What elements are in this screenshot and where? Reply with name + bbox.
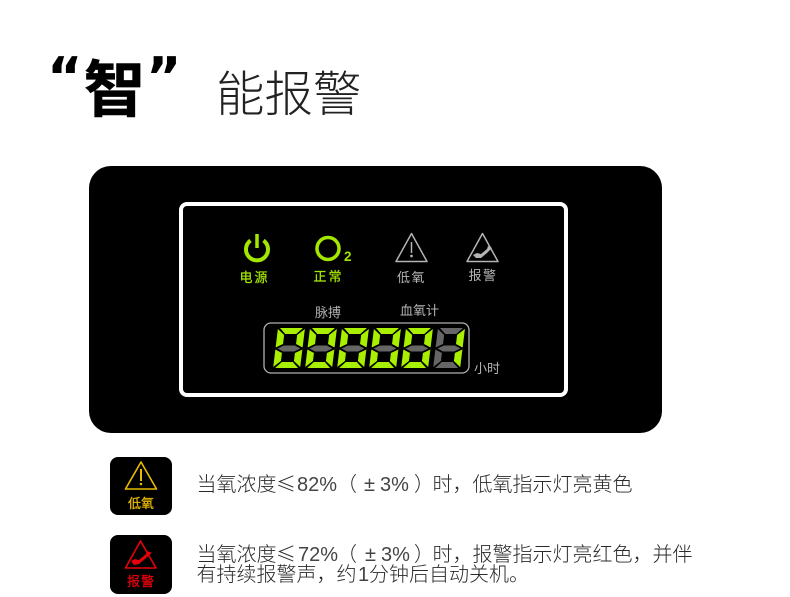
text: alarm description: 时，报警指示灯亮红色，并伴 — [432, 543, 692, 566]
label: power: 电源 — [239, 270, 270, 285]
text: alarm description: ≤ — [276, 538, 296, 567]
text: alarm description: 当氧浓度 — [196, 543, 276, 566]
text: low oxygen description: （ — [337, 474, 357, 496]
seven-segment digits — [273, 328, 465, 368]
text: low oxygen description: ± — [364, 474, 375, 496]
icon: red alarm badge: 报警 — [127, 574, 155, 589]
seven-segment display frame — [264, 323, 469, 373]
panel: device display — [89, 166, 662, 433]
title: closing quote: ” — [146, 46, 182, 109]
label: normal: 正常 — [313, 269, 344, 284]
text: low oxygen description: ≤ — [276, 468, 296, 497]
icon: low oxygen triangle — [396, 234, 427, 262]
text: alarm description — [196, 538, 692, 586]
text: alarm description: 1 — [358, 564, 369, 586]
title: opening quote: “ — [47, 46, 82, 109]
text: alarm description: ± — [365, 544, 376, 566]
icon: yellow low oxygen badge — [110, 457, 172, 515]
icon: O2 normal — [317, 238, 352, 264]
label: alarm: 报警 — [468, 268, 498, 283]
icon: red alarm badge — [110, 535, 172, 594]
text: alarm description: （ — [337, 544, 357, 566]
text: low oxygen description — [196, 468, 632, 497]
text: alarm description: 72% — [298, 544, 338, 566]
text: low oxygen description: 时，低氧指示灯亮黄色 — [432, 473, 632, 496]
icon: alarm triangle — [467, 234, 498, 262]
icon: O2 normal: 2 — [344, 249, 352, 264]
title: emphasised character: 智 — [84, 56, 145, 124]
text: alarm description: ） — [414, 544, 434, 566]
label: pulse: 脉搏 — [315, 305, 341, 320]
title: regular characters: 能报警 — [216, 68, 362, 122]
label: hours: 小时 — [474, 361, 500, 376]
text: low oxygen description: ） — [414, 474, 434, 496]
title — [47, 46, 362, 124]
text: low oxygen description: 当氧浓度 — [196, 473, 276, 496]
text: low oxygen description: 82% — [297, 474, 337, 496]
icon: power — [246, 234, 268, 260]
icon: yellow low oxygen badge: 低氧 — [128, 496, 154, 511]
text: alarm description: 有持续报警声，约 — [196, 563, 356, 586]
text: low oxygen description: 3% — [380, 474, 409, 496]
label: oximeter: 血氧计 — [400, 303, 439, 318]
text: alarm description: 分钟后自动关机。 — [369, 563, 529, 586]
label: low oxygen: 低氧 — [397, 270, 426, 285]
text: alarm description: 3% — [381, 544, 410, 566]
display frame — [181, 204, 566, 395]
